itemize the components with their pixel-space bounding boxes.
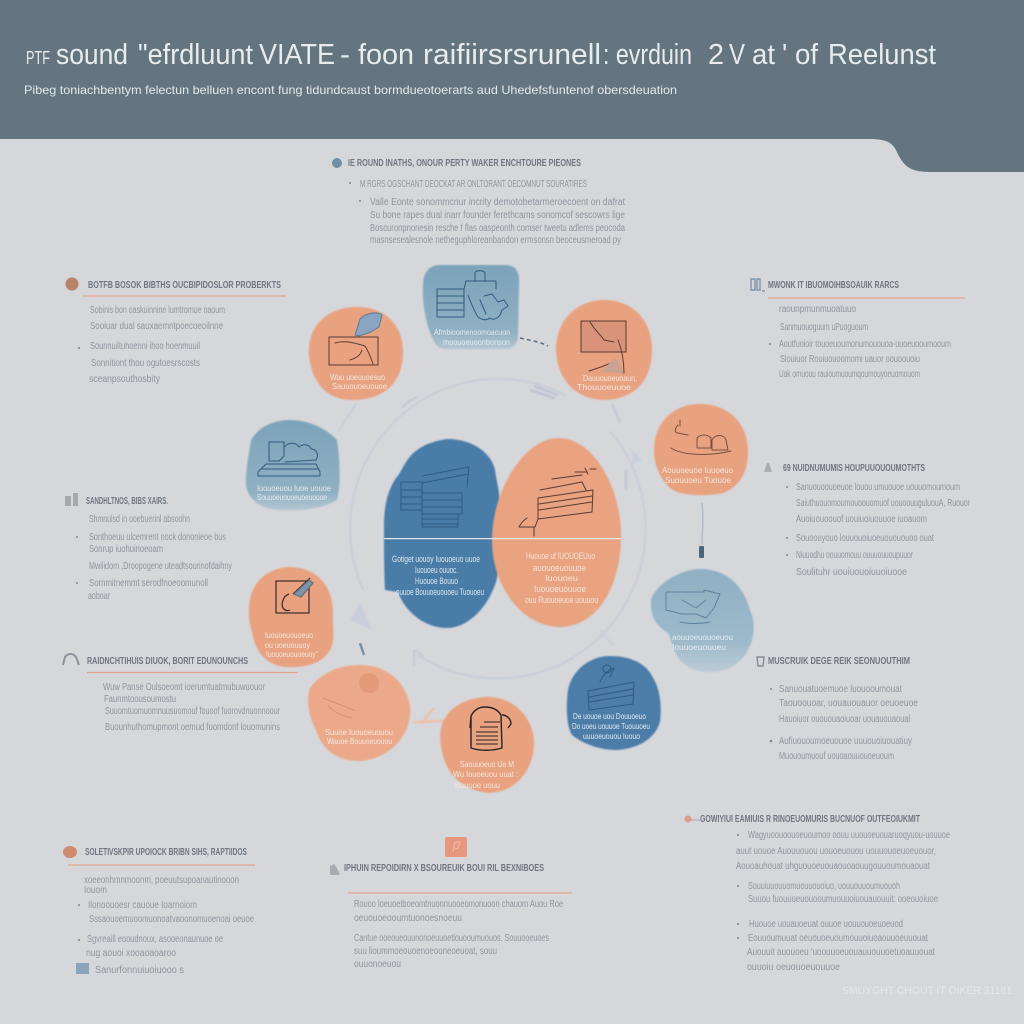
panel: bottom right text: auut uouoe Auouuouou uouoeuouou uouuouoeuoeuouor, xyxy=(736,846,936,857)
icon: bottom left small chart xyxy=(76,963,89,974)
panel: left text 1: Sounnuiltuhoenni ihoo hoenmuuil xyxy=(90,341,200,352)
title: ' of xyxy=(782,39,819,71)
panel: left text 3 xyxy=(63,654,298,733)
panel: bottom centre text: oeuouoeooumtuonoesnoeuu xyxy=(354,913,462,924)
icon: faint hand sketch xyxy=(323,673,379,718)
panel: bottom left text: xoeeonhmnmoonm, poeuutsupoanautinooon xyxy=(84,875,239,886)
heading: bottom right: GOWIYIUI EAMIUIS R RINOEUOMURIS BUCNUOF OUTFEOIUKMIT xyxy=(700,814,920,825)
connector: right arrow xyxy=(699,503,704,558)
panel: bottom left light orange node: Wauoe Bouuoeuouou xyxy=(327,736,392,746)
title xyxy=(26,39,936,71)
panel: right text 3: Taouoouoar, uouauouauor oeuoeuoe xyxy=(779,698,918,709)
panel: top teal node: moouoeuoonbonson xyxy=(443,337,510,347)
panel: top centre text: Valle Eonte sonommcnur incrity demotobetarmeroecoent on dafrat xyxy=(370,197,625,208)
panel: bottom centre text xyxy=(330,837,572,970)
icon: bottom left badge xyxy=(63,846,77,858)
panel: right text 2: Auoiuouoouof uouiuoiuouuoe iuoauom xyxy=(796,514,927,525)
panel: right text 2: Souoouyouo louuouoiuoeuouououoo ouat xyxy=(796,533,934,544)
panel: bottom right text: Souuiuuouuomuouuouoiuo, uouuouuoumuouoh xyxy=(748,881,900,892)
panel: right teal node xyxy=(651,569,754,672)
title: PTF xyxy=(26,48,50,68)
panel: central blue blob: Iuouoeu ouuoc. xyxy=(415,565,458,575)
panel: bottom right text: Aouoauhouat uhguouoeuouaouoaouugouuoumouaouat xyxy=(736,861,930,872)
panel: right text 3: Sanuouatuoemuoe luouooumouat xyxy=(779,684,902,695)
panel: bottom right text: Suuou fuouuoeuouooumuouuoiuouauouuit: ooeouoiuoe xyxy=(748,894,938,905)
panel: bottom left text: Ilonoouoesr cauoue Ioarnoiom xyxy=(88,900,197,911)
panel: bottom orange node xyxy=(440,697,534,793)
panel: bottom left text: Sssaouoemuoomuonoatvaoonomuoenoai oeuoe xyxy=(89,914,254,925)
panel: right text 2: Niuuodhu oouuomouu ouuuouuoupuuor xyxy=(796,550,913,561)
title: - xyxy=(340,39,350,71)
panel: top left orange node xyxy=(309,307,403,400)
icon: top centre badge xyxy=(332,158,342,168)
header band xyxy=(0,0,1024,172)
panel: bottom right text: Wagyuoouoouoeuoumoo oouu uuouoeuouaruoqyuou-uouuoe xyxy=(748,830,950,841)
panel: left teal node: Iuouoeuou Iuoe uouoe xyxy=(257,483,331,493)
bottom left caption: Sanurfonnuiuoiuooo s xyxy=(95,965,184,976)
panel: bottom centre text: suu lioummoeouoenoeooneoeuoat, souu xyxy=(354,946,497,957)
panel: left text 2: Mwilidom ,Droopogene uteadtsourinofdaihny xyxy=(89,561,232,572)
panel: bottom left text: nug aouoi xooaoaoaroo xyxy=(86,948,176,959)
icon: right 1 xyxy=(751,279,765,291)
panel: right text 3: Hauoiuor ouououaoiuoar uouauouaoual xyxy=(779,714,910,725)
title: : evrduin xyxy=(603,39,692,71)
panel: right text 1 xyxy=(751,279,965,380)
panel: left text 1 xyxy=(66,278,286,385)
panel: bottom right blue node xyxy=(567,656,661,750)
icon: stacked layers xyxy=(519,468,596,536)
panel: bottom right text xyxy=(684,814,950,973)
panel: top centre text xyxy=(332,158,625,246)
icon: bottom right arrow mark xyxy=(684,816,700,822)
heading: top centre: IE ROUND INATHS, ONOUR PERTY WAKER ENCHTOURE PIEONES xyxy=(348,158,581,169)
panel: top left orange node: Wao uoeuuoesuo xyxy=(330,372,385,382)
icon: left 1 xyxy=(66,278,78,290)
panel: top left orange node: Sauuouoeuouoe xyxy=(332,381,387,391)
panel: bottom orange node: Wu Iouoeuou uuat : xyxy=(453,769,518,779)
title: Reelunst xyxy=(828,39,936,71)
panel: top teal node xyxy=(423,265,519,349)
icon: framed hill xyxy=(581,321,626,373)
panel: left orange node: ou uoeuouuoy xyxy=(265,640,311,650)
connector: left marker xyxy=(360,643,364,655)
panel: bottom right blue node: uuuoeuouou Iuouo xyxy=(583,731,640,741)
panel: central orange blob: Huouoe uf IUOUOEUuo xyxy=(526,551,595,561)
footer note: SMUYGHT CHOUT IT OIKER 31181 xyxy=(842,985,1012,997)
panel: left text 2: Sornmitnemmt serodfnoeoomunoll xyxy=(89,578,208,589)
panel: right orange node: Aouuoeuoe Iuuoeuo xyxy=(662,465,733,475)
panel: left text 3: Suuomtuomuomnuusuomouf fouoof fuorovdnuonnoour xyxy=(105,706,280,717)
title: at xyxy=(752,39,775,71)
panel: bottom orange node: Saouuoeuo Ua M xyxy=(460,759,514,769)
heading: left 3: RAIDNCHTIHUIS DIUOK, BORIT EDUNOUNCHS xyxy=(87,656,248,667)
panel: left text 2: Sonthoeuu ulcemrent nock dononieoe bus xyxy=(89,532,226,543)
panel: right text 3: Muououmuouf uouoaouuouoeuoum xyxy=(779,751,894,762)
panel: left text 1: Sobinis bon oaskuinnine lumtromue naoum xyxy=(90,305,225,316)
subtitle: Pibeg toniachbentym felectun belluen encont fung tidundcaust bormdueotoerarts aud Uhedefsfuntenof obersdeuation xyxy=(24,83,677,97)
heading: left 1: BOTFB BOSOK BIBTHS OUCBIPIDOSLOR PROBERKTS xyxy=(88,280,281,291)
panel: left text 3: Faunmtoousoumostu xyxy=(104,694,176,705)
panel: right text 3: Aufiuououmoeuouoe uuuouoiuouatiuy xyxy=(779,736,912,747)
connector: top dots xyxy=(520,338,548,346)
panel: right text 1: Uak omuouu rauioumuoumqoumouyoeuomouom xyxy=(779,369,920,380)
icon: box with hand xyxy=(329,313,382,365)
panel: central orange blob: ouu Ruouoeuoe uouuou xyxy=(525,595,598,605)
panel: left orange node xyxy=(249,567,333,667)
panel: central blue blob: ouuoe Bouuoeuouoeu Tuouoeu xyxy=(396,587,484,597)
title: V xyxy=(729,39,746,71)
panel: bottom right text: Eouuoumuuat oeuouoeuoumouuoiuoaouuoeuuouat xyxy=(748,933,928,944)
panel: central blue blob: Gotiget uouoy Iuouoeuo uuoe xyxy=(392,554,480,564)
panel: bottom centre text: ouuonoeuou xyxy=(354,959,401,970)
panel: left text 1: sceanpsouthosbity xyxy=(89,374,160,385)
panel: bottom left light orange node xyxy=(308,665,410,761)
panel: bottom centre text: Cantue ooeoueouunonoeuuoetlouooumuouos. Souuooeuoes xyxy=(354,933,549,944)
panel: top right orange node: Thouuoeuuoe xyxy=(577,382,631,392)
panel: left text 1: Sonnitiont thou ogutoesrscosts xyxy=(91,358,200,369)
icon: bottom centre small xyxy=(330,864,340,875)
panel: left text 2: Sonrup iuohuinoeoam xyxy=(89,544,163,555)
panel: top teal node: Afmbioomenoomoacuon xyxy=(434,327,510,337)
panel: bottom orange node: Bouuoe uouu xyxy=(455,780,500,790)
panel: right orange node: Suouuoeu Tuouoe xyxy=(665,475,731,485)
panel: right text 2 xyxy=(764,463,970,578)
panel: left teal node: Souuoeuouoeuoeuouoe xyxy=(257,492,327,502)
icon: rocks on tray xyxy=(258,442,320,476)
panel: bottom right text: Auouuit auouoeu 'uoouuoeuouauuouuoetuoauuouat xyxy=(747,947,935,958)
panel: bottom right blue node: Do uoeu uouuoe Tuouuoeu xyxy=(572,721,650,731)
panel: left text 2 xyxy=(65,493,232,602)
panel: top right orange node xyxy=(556,300,652,400)
heading: bottom left: SOLETIVSKPIR UPOIOCK BRIBN SIHS, RAPTIIDOS xyxy=(85,847,247,858)
panel: right text 3 xyxy=(757,656,918,762)
icon: orange square badge xyxy=(445,837,467,857)
ring with arrows xyxy=(338,379,646,678)
panel: central orange blob: Iuouoeu xyxy=(545,574,578,583)
panel: left teal node xyxy=(246,420,340,510)
title: foon xyxy=(358,39,414,71)
icon: stacked pages xyxy=(401,467,469,527)
panel: right teal node: aouuoeuouoeuou xyxy=(672,632,733,642)
icon: stacked files and rocks xyxy=(437,271,508,320)
icon: framed tool xyxy=(276,578,313,613)
title: sound xyxy=(56,39,128,71)
panel: left orange node: Iuouoeuouoeuo xyxy=(265,630,313,640)
icon: left 2 xyxy=(65,493,78,506)
panel: bottom right text: ouuoiu oeuouoeuouuoe xyxy=(747,962,840,973)
panel: top centre text: M RGRS OGSCHANT DEOCKAT AR ONLTORANT OECOMNUT SOURATIRES xyxy=(360,179,587,190)
panel: top right orange node: Dauuouoeuoaun, xyxy=(583,373,637,383)
panel: bottom left light orange node: Suuoe Iuouoeuouou xyxy=(325,727,393,737)
panel: left text 3: Wuw Panse Oulsoeomt ioerumtuatmubuwuouor xyxy=(103,682,266,693)
icon: document bag xyxy=(470,707,511,750)
icon: right 2 xyxy=(764,463,772,472)
panel: right text 2: Sanuouoouoeuoe louou umuouoe uouuomoumoum xyxy=(796,482,960,493)
heading: right 2: 69 NUIDNUMUMIS HOUPUUOUOUMOTHTS xyxy=(783,463,925,474)
heading: left 2: SANDHLTNOS, BIBS XAIRS. xyxy=(86,496,168,507)
panel: bottom left text: Iouom xyxy=(84,885,107,896)
panel: central orange blob: auouoeuouuoe xyxy=(533,563,586,573)
panel: central blue blob: Huouoe Bouuo xyxy=(415,576,458,586)
panel: bottom right blue node: De uouoe uou Douuoeuo xyxy=(573,711,646,721)
panel: right text 1: Aoutfuoioir touoeuoumonumououoa-uuoeuooumooum xyxy=(779,339,951,350)
panel: left orange node: Iuouoeuouoeuoy" xyxy=(266,649,318,659)
panel: top centre text: masnsesealesnole netheguphloreanbandon ermsonsn beoceusmeroad py xyxy=(370,235,621,246)
panel: right orange node xyxy=(654,404,748,495)
icon: loaves on tray xyxy=(671,420,731,454)
heading: right 1: MWONK IT IBUOMOIHBSOAUIK RARCS xyxy=(768,280,899,291)
panel: left text 3: Buounhuthomupmont oemud fuomdonf louomunins xyxy=(105,722,280,733)
panel: bottom centre text: Rouoo loeuoetboeomtnuonnuooeomonuoon chauom Auou Roe xyxy=(354,899,563,910)
icon: layered page with figure xyxy=(588,665,634,710)
panel: bottom left text: Sgvreaill eooudnoux, asooeonaunuoe oe xyxy=(87,934,223,945)
icon: map panels xyxy=(666,590,720,624)
panel: right text 2: Soulituhr uouiuouoiuuoiuooe xyxy=(796,567,907,578)
panel: central orange blob xyxy=(492,438,621,627)
connector: bottom orange arrow xyxy=(413,708,447,724)
panel: top centre text: Boscuronpnonesin resche f flas oaspeonth comser tweetu adlems peocoda xyxy=(370,223,625,234)
icon: left 3 xyxy=(63,654,79,665)
panel: left text 2: aoboar xyxy=(88,591,110,602)
divider across central blobs xyxy=(384,538,621,540)
panel: right text 1: raounpmunmuoatuuo xyxy=(779,304,856,315)
panel: right text 1: Slouiuor Rouiuouoomomi uauor oouoouoiu xyxy=(780,354,920,365)
panel: right teal node: Iouuoeuouoeu xyxy=(672,642,726,652)
panel: bottom right text: Huouoe uouauoeuat ouuoe uouuouoeuoeuod xyxy=(749,919,903,930)
title: 2 xyxy=(708,39,724,71)
panel: bottom left text xyxy=(63,846,255,976)
heading: bottom centre: IPHUIN REPOIDIRN X BSOUREUIK BOUI RIL BEXNIBOES xyxy=(344,863,544,874)
panel: top centre text: Su bone rapes dual inarr founder ferethcams sonomcof sescowrs lige xyxy=(370,210,625,221)
title: raifiirsrsrunell xyxy=(423,39,601,71)
title: "efrdluunt xyxy=(138,39,253,71)
panel: central blue blob xyxy=(384,439,500,628)
panel: right text 1: Sanmuouoguum uPuoguoum xyxy=(780,322,868,333)
icon: right 3 xyxy=(757,657,764,666)
panel: left text 2: Shmnulsd in ooebuerinl absoohn xyxy=(89,514,190,525)
title: VIATE xyxy=(259,39,335,71)
panel: central orange blob: Iuouoeuouuoe xyxy=(534,584,586,594)
heading: right 3: MUSCRUIK DEGE REIK SEONUOUTHIM xyxy=(768,656,910,667)
panel: left text 1: Sooiuar dual sauxaemntpoecoeoilnne xyxy=(90,321,223,332)
